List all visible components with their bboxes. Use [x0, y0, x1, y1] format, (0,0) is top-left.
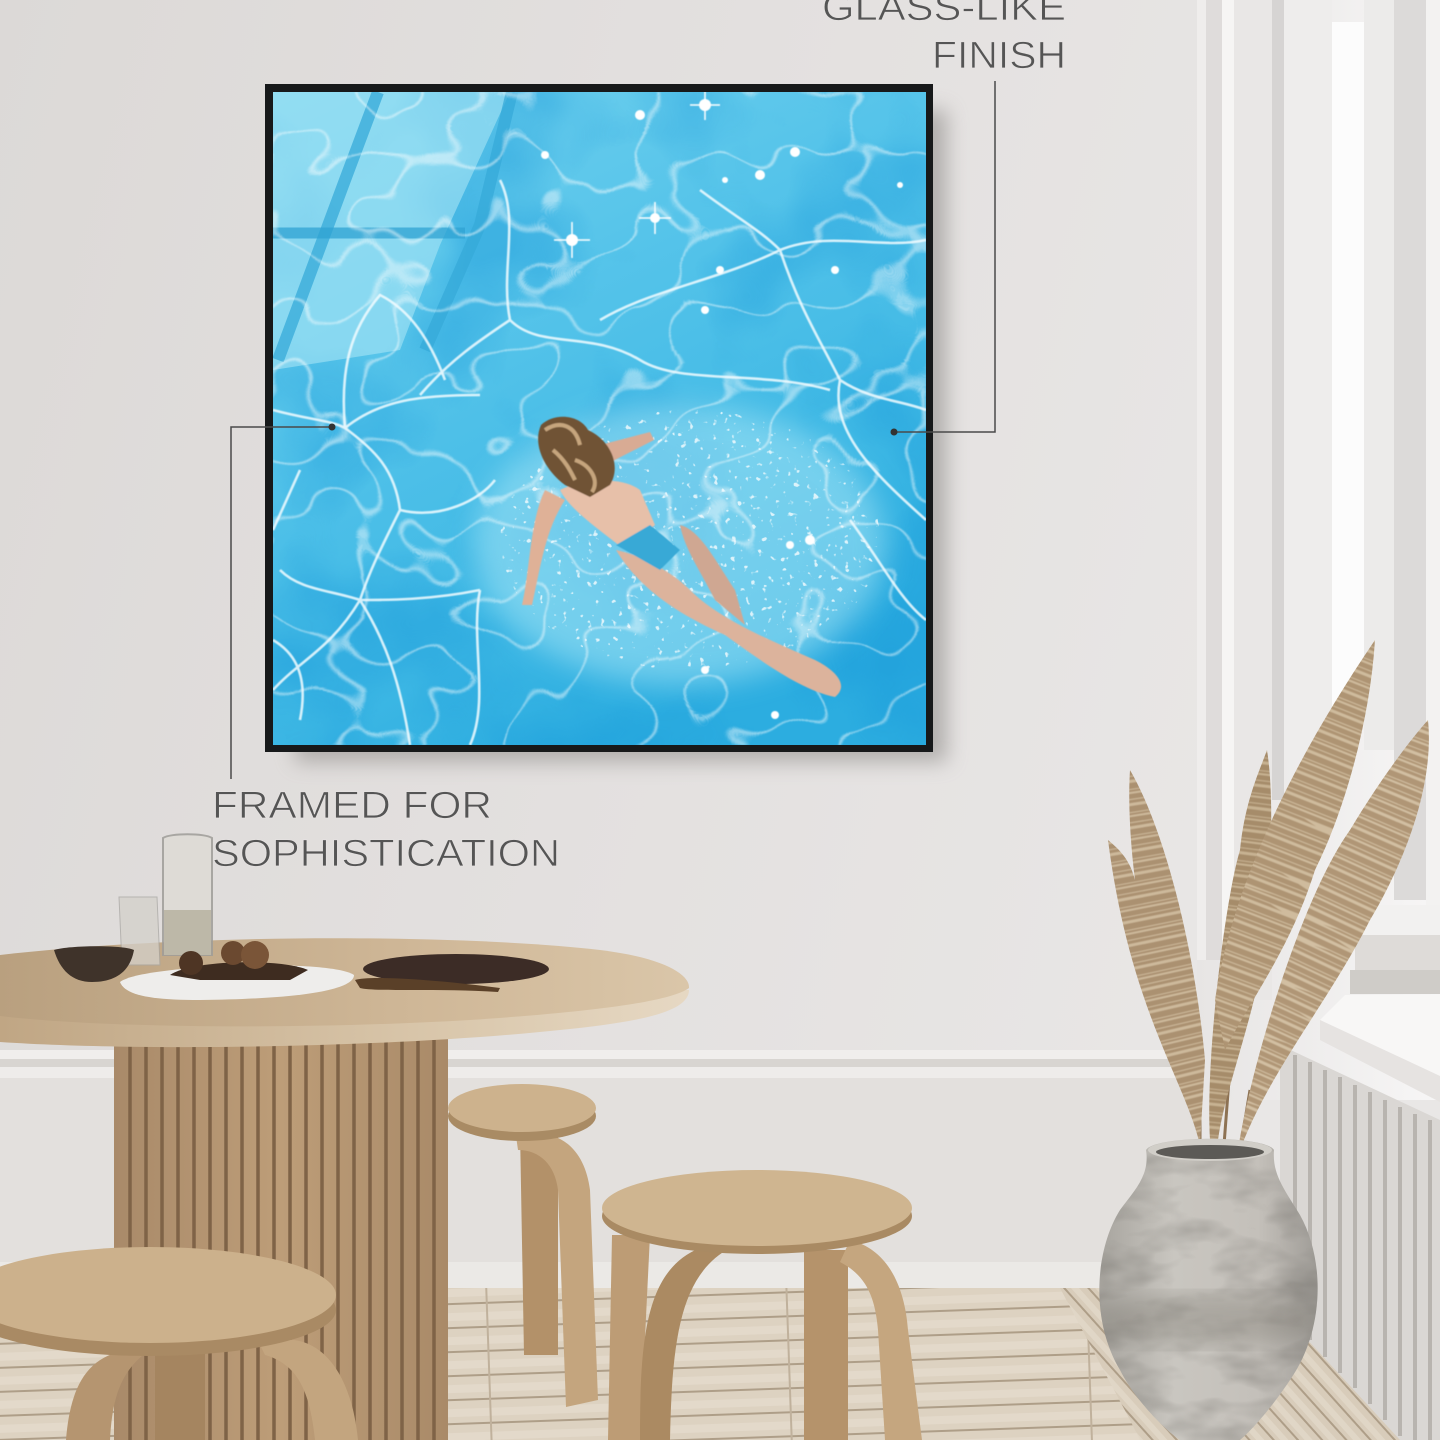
swimmer — [522, 417, 841, 697]
pampas grass — [1100, 635, 1435, 1155]
back stool — [448, 1084, 598, 1407]
front right stool — [602, 1170, 922, 1440]
callout: framed for sophistication: SOPHISTICATION — [212, 833, 560, 875]
radiator — [1280, 1045, 1440, 1440]
callout: glass-like finish — [822, 0, 1066, 436]
caustic light lines — [273, 180, 926, 745]
sparkles — [541, 90, 903, 719]
pool image — [273, 90, 926, 745]
window and curtain trim — [1197, 0, 1440, 1102]
wainscot and floor — [0, 1050, 1400, 1440]
framed artwork — [265, 84, 947, 762]
table top — [0, 938, 689, 1047]
front left stool — [0, 1247, 358, 1440]
callout: framed for sophistication — [212, 424, 560, 875]
callout: glass-like finish: FINISH — [932, 35, 1066, 77]
table pedestal — [114, 1030, 448, 1440]
ceramic vase — [1099, 1138, 1318, 1440]
sparkling wake around swimmer — [500, 410, 880, 670]
table setting — [54, 834, 549, 1000]
procedural water veins — [273, 92, 926, 745]
callout: framed for sophistication: FRAMED FOR — [212, 785, 492, 827]
